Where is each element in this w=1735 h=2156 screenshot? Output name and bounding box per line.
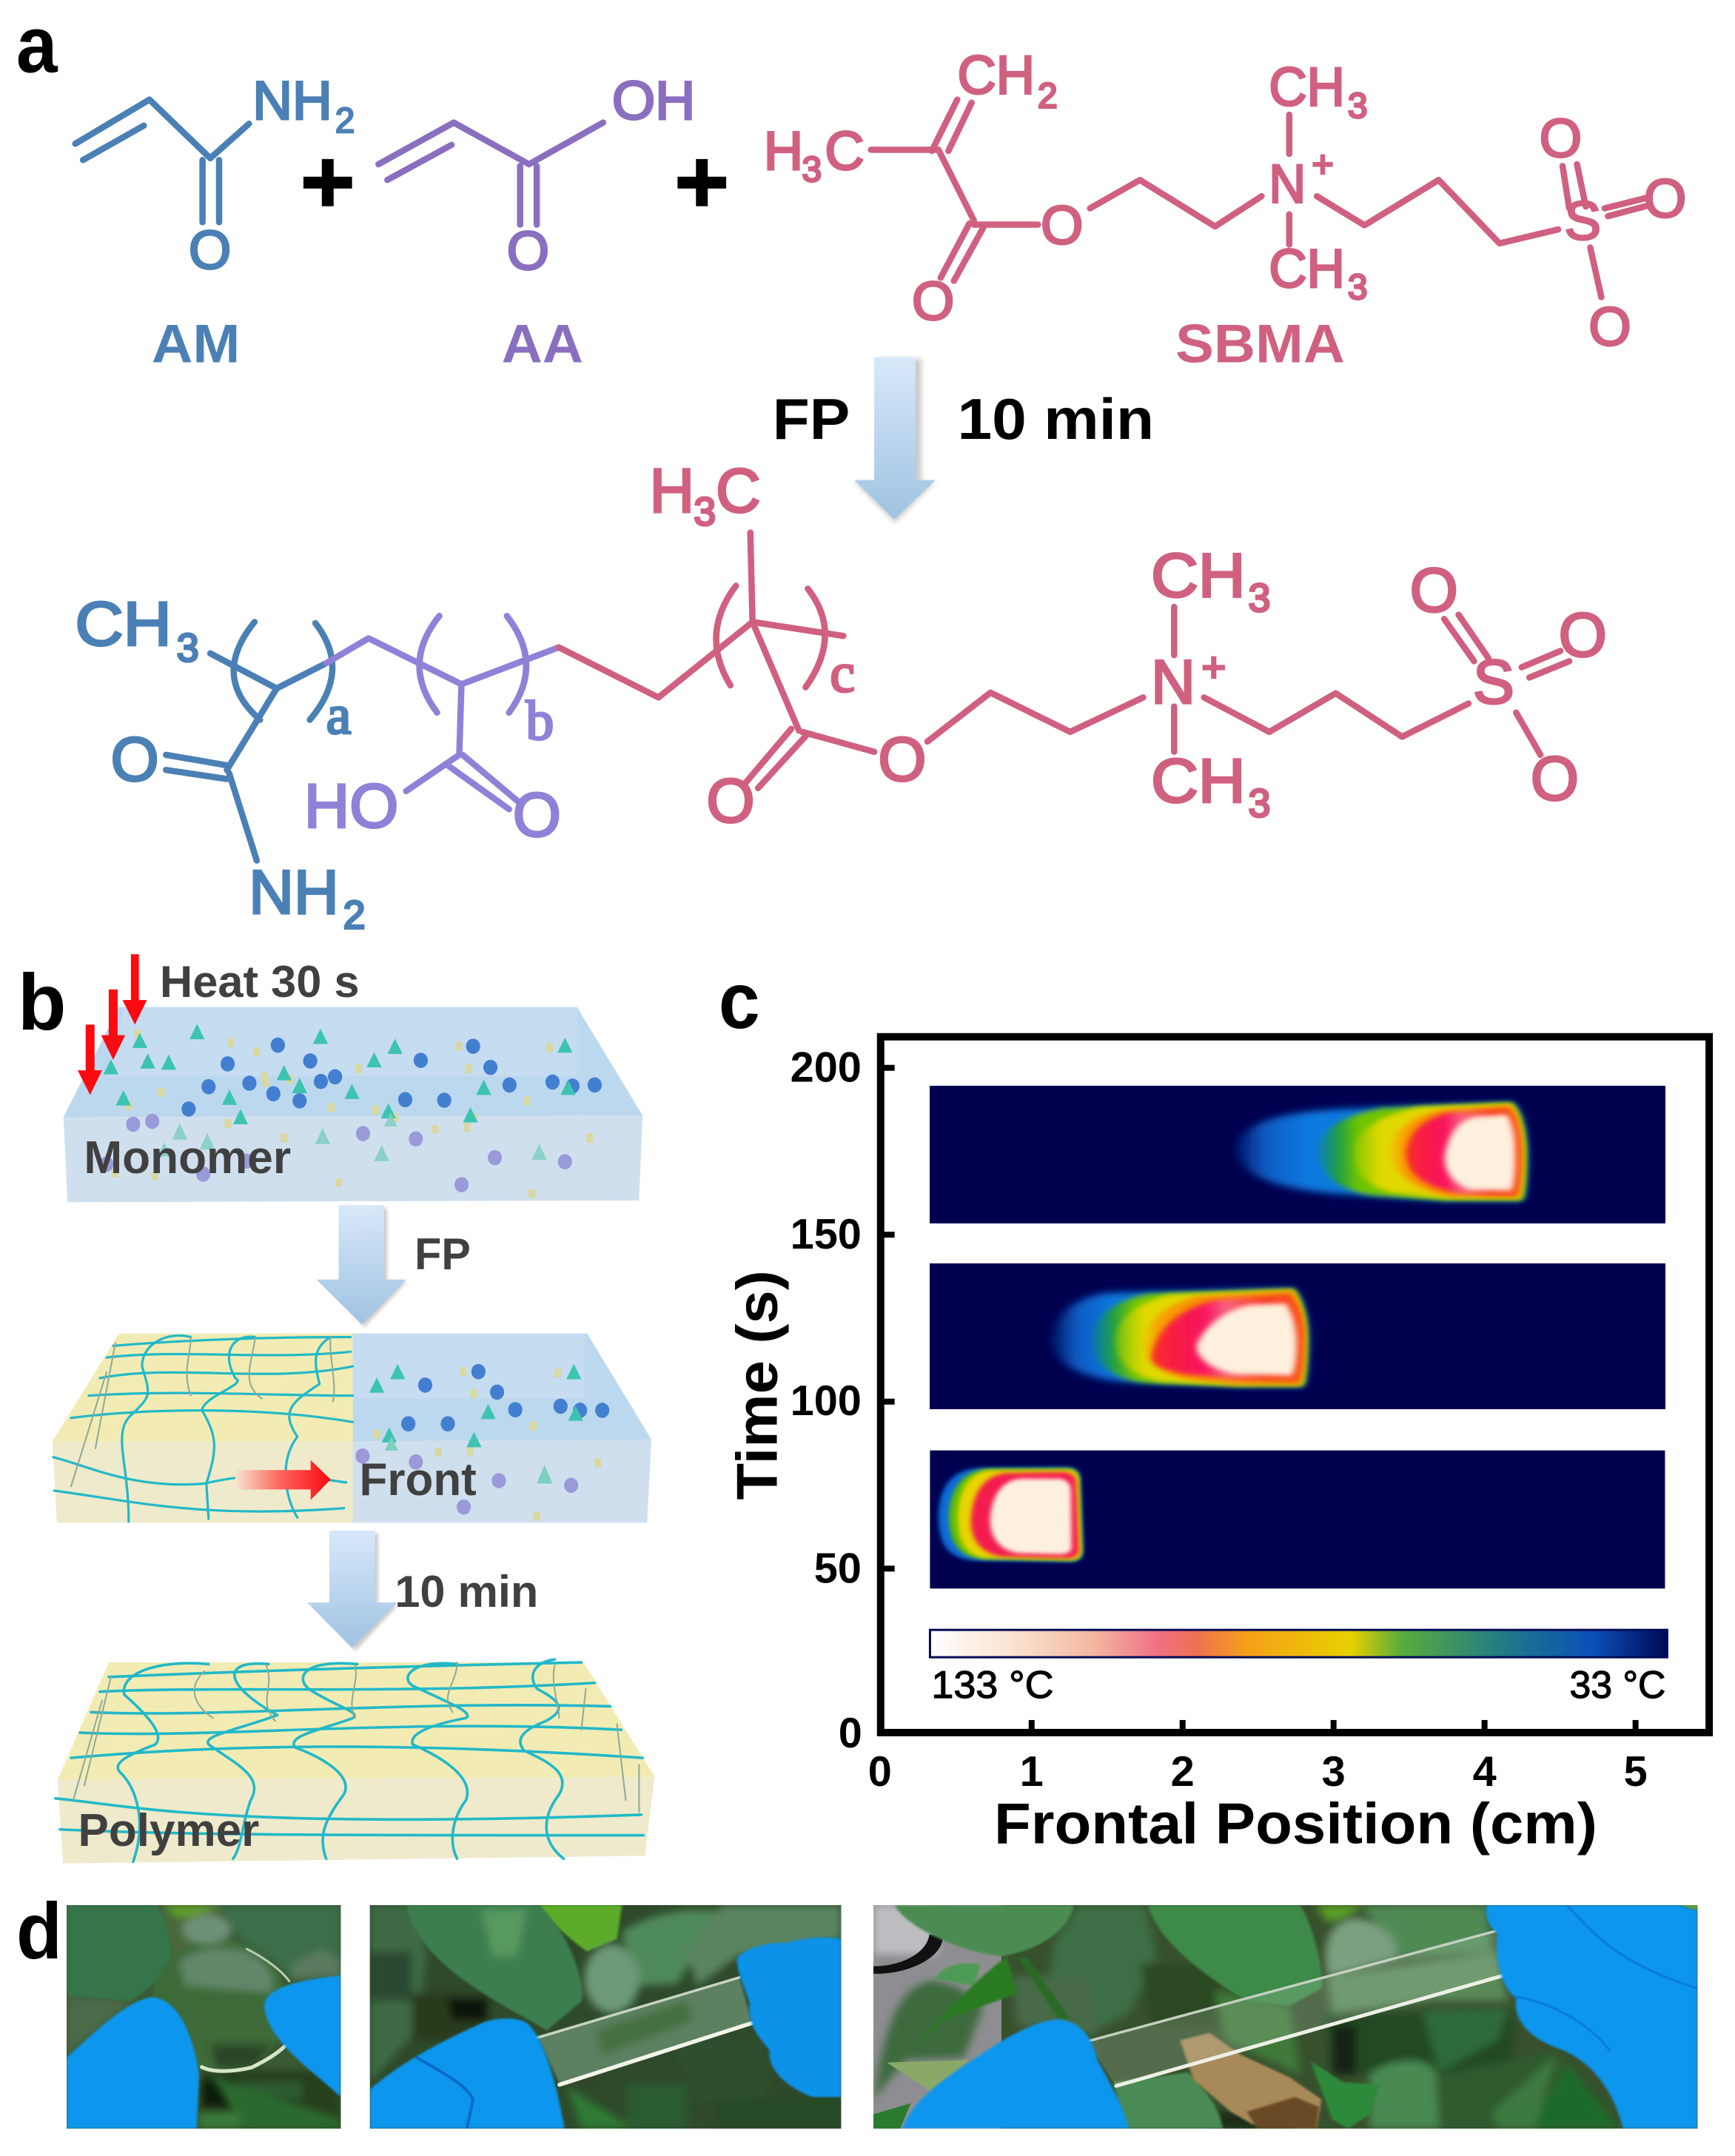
y axis tick labels (791, 1044, 862, 1757)
plus sign (303, 159, 352, 206)
polymer: SBMA unit: C (716, 456, 760, 525)
polymer: SBMA unit: CH (1151, 746, 1246, 816)
polymer: SBMA unit: N (1151, 647, 1195, 716)
polymer: AM unit: O (111, 725, 159, 794)
polymer: SBMA unit (559, 456, 1607, 835)
monomer AA (378, 70, 695, 375)
monomer SBMA: CH (1269, 238, 1345, 299)
polymer: AA unit: b (526, 691, 554, 752)
polymer: SBMA unit: 3 (1249, 576, 1270, 620)
monomer SBMA: CH (958, 44, 1035, 105)
monomer SBMA: H (764, 120, 803, 181)
plus sign (677, 159, 726, 206)
monomer AA: AA (502, 313, 583, 375)
front slab (53, 1334, 651, 1523)
polymer: AA unit: HO (304, 770, 398, 840)
panel label c: c (719, 956, 760, 1045)
monomer particles (99, 1024, 602, 1198)
front label: Front (360, 1454, 477, 1505)
panel b: frontal polymerization schematic (18, 954, 654, 1864)
photo 2: film stretched (370, 1905, 841, 2129)
axis ticks (881, 1068, 1636, 1733)
polymer: AM unit: NH (249, 857, 339, 927)
monomer AM: 2 (335, 101, 355, 141)
polymer: AM unit (75, 589, 366, 938)
polymer: SBMA unit: O (1410, 555, 1458, 625)
monomer SBMA: O (1588, 296, 1631, 357)
monomer AA: O (507, 220, 549, 281)
x axis tick labels: 0 (868, 1748, 892, 1796)
panel a: chemical reaction scheme (16, 1, 1686, 938)
monomer SBMA: CH (1269, 56, 1345, 117)
photo 1: round film held by gloves (67, 1905, 340, 2129)
photo 3: film stretched further (873, 1905, 1697, 2129)
x axis tick labels: 2 (1171, 1748, 1195, 1796)
panel label d: d (16, 1886, 62, 1975)
monomer SBMA: 2 (1038, 76, 1058, 115)
monomer SBMA: 3 (1348, 87, 1367, 126)
monomer SBMA: C (825, 120, 865, 181)
plot frame (881, 1037, 1709, 1733)
x axis tick labels (868, 1748, 1648, 1796)
polymer: SBMA unit: O (707, 765, 755, 835)
monomer SBMA: + (1312, 144, 1334, 185)
monomer AM (75, 70, 355, 375)
down arrow 10 min (307, 1531, 398, 1650)
x axis tick labels: 1 (1020, 1748, 1044, 1796)
down arrow FP (317, 1205, 407, 1327)
polymer: SBMA unit: 3 (1249, 781, 1270, 825)
monomer label: Monomer (84, 1132, 291, 1183)
panel c: thermal map chart (719, 956, 1709, 1856)
polymer slab (56, 1659, 654, 1864)
monomer SBMA: O (1644, 168, 1686, 229)
polymer network (53, 1335, 353, 1522)
10 min label: 10 min (958, 388, 1154, 451)
x axis title: Frontal Position (cm) (994, 1793, 1597, 1856)
monomer SBMA: O (1041, 194, 1083, 255)
panel d: photographs of stretched hydrogel (16, 1886, 1697, 2129)
y axis tick labels: 100 (791, 1377, 862, 1425)
polymer: AM unit: a (326, 685, 351, 746)
polymer network (56, 1659, 643, 1861)
color scale labels: 133 °C (931, 1663, 1054, 1706)
polymer: AA unit: O (513, 779, 561, 849)
polymer: SBMA unit: c (830, 642, 855, 704)
monomer AM: O (189, 219, 231, 281)
monomer slab (64, 1007, 642, 1202)
FP label: FP (773, 388, 850, 451)
polymer: SBMA unit: S (1473, 647, 1514, 716)
x axis tick labels: 4 (1473, 1748, 1497, 1796)
polymer: AA unit (304, 616, 561, 849)
monomer AM: NH (252, 70, 332, 131)
monomer SBMA: O (912, 270, 954, 332)
polymer: SBMA unit: O (1559, 600, 1607, 670)
polymer label: Polymer (78, 1805, 259, 1856)
panel label a: a (16, 1, 58, 90)
heat arrows (78, 954, 147, 1095)
monomer SBMA: O (1540, 107, 1582, 169)
polymer: AM unit: CH (75, 589, 172, 659)
monomer SBMA: 3 (1348, 268, 1367, 307)
monomer SBMA: N (1269, 153, 1306, 215)
monomer AM: AM (152, 313, 240, 375)
color scale bar (930, 1630, 1667, 1657)
y axis title: Time (s) (726, 1270, 789, 1500)
polymer: SBMA unit: H (650, 456, 694, 525)
polymer: SBMA unit: 3 (694, 489, 716, 534)
front arrow (235, 1460, 331, 1500)
polymer: SBMA unit: O (878, 725, 926, 794)
monomer SBMA (764, 44, 1686, 375)
panel label b: b (18, 957, 67, 1047)
polymer: SBMA unit: CH (1151, 540, 1246, 610)
monomer SBMA: S (1565, 189, 1601, 251)
thermal strip 100-150 s (930, 1263, 1665, 1409)
polymer: SBMA unit: + (1201, 644, 1226, 690)
remaining monomer particles (355, 1364, 609, 1520)
polymer: AM unit: 2 (343, 893, 366, 938)
polymer: SBMA unit: O (1531, 744, 1579, 813)
color scale labels (931, 1663, 1665, 1706)
monomer SBMA: SBMA (1175, 313, 1345, 375)
heat label: Heat 30 s (160, 957, 360, 1007)
reaction arrow (854, 357, 936, 523)
y axis tick labels: 0 (839, 1710, 862, 1757)
thermal strip 50-100 s (930, 1451, 1665, 1588)
10 min label: 10 min (395, 1567, 538, 1616)
polymer: AM unit: 3 (177, 626, 199, 671)
x axis tick labels: 3 (1322, 1748, 1346, 1796)
y axis tick labels: 50 (814, 1545, 862, 1592)
thermal strip 150-200 s (930, 1086, 1665, 1223)
x axis tick labels: 5 (1624, 1748, 1648, 1796)
monomer AA: OH (612, 70, 695, 131)
monomer SBMA: 3 (802, 150, 822, 189)
y axis tick labels: 200 (791, 1044, 862, 1092)
FP label: FP (415, 1229, 471, 1279)
color scale labels: 33 °C (1569, 1663, 1665, 1706)
y axis tick labels: 150 (791, 1211, 862, 1258)
